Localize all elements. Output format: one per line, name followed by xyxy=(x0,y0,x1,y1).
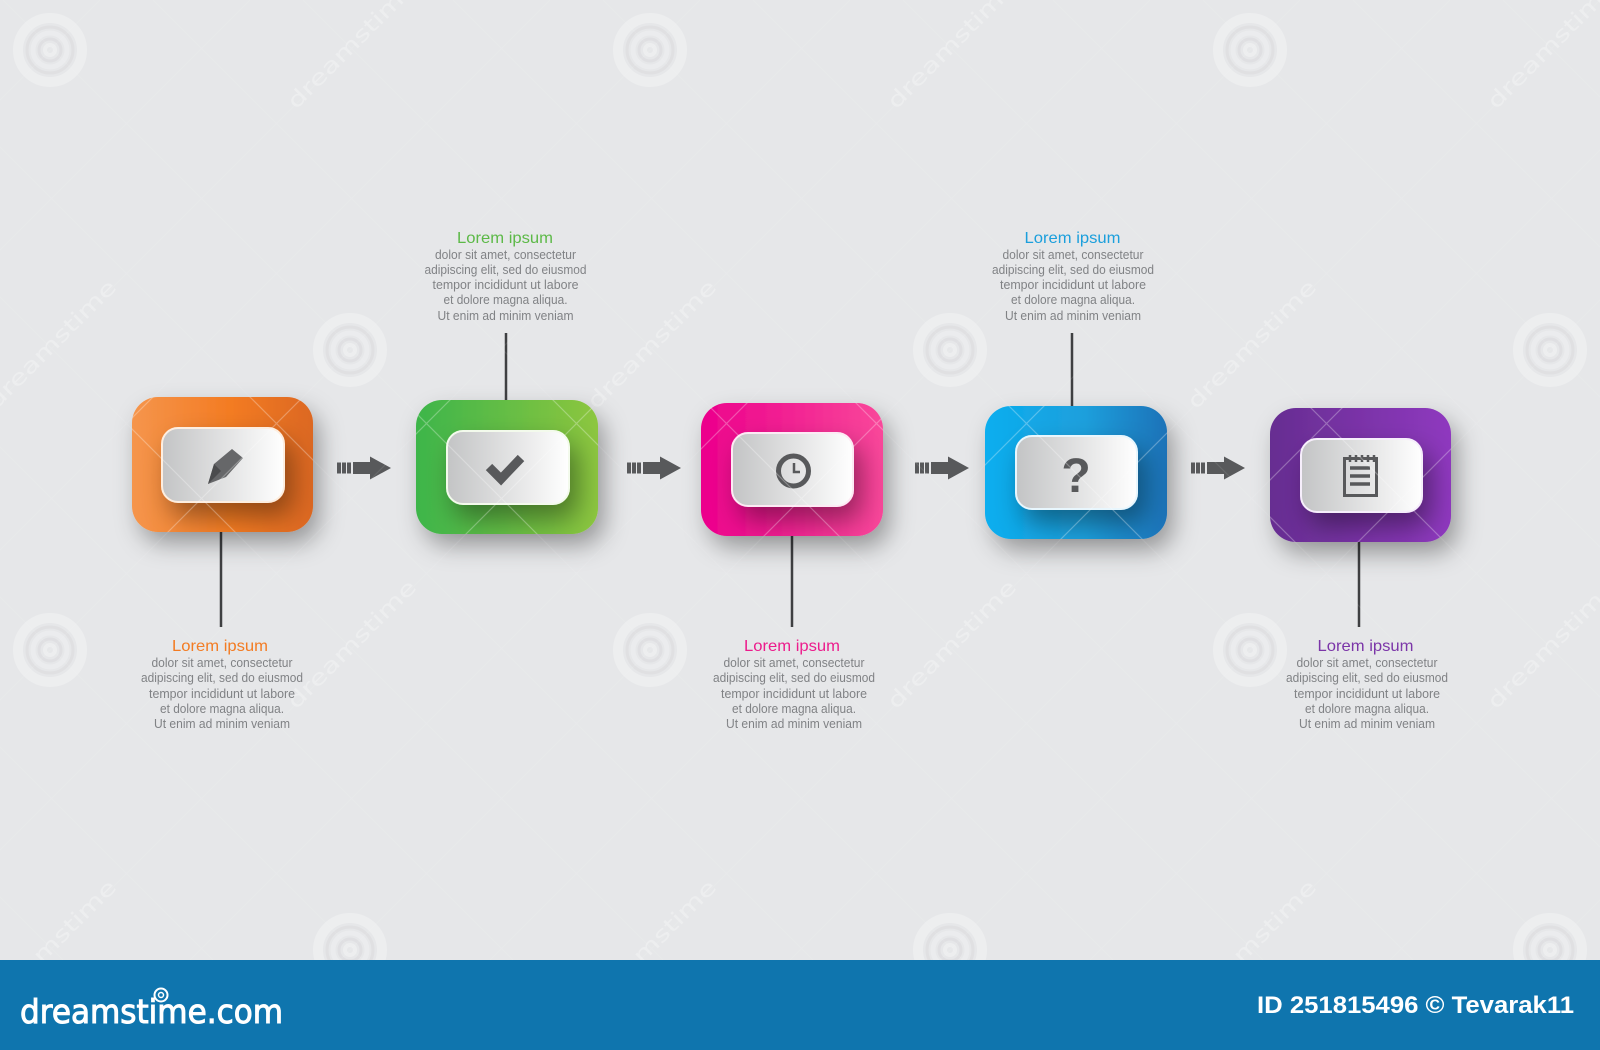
watermark text: dreamstime xyxy=(1183,875,1321,1014)
text block: step 3: adipiscing elit, sed do eiusmod xyxy=(713,671,875,685)
text block: step 2: Lorem ipsum xyxy=(457,230,553,247)
text block: step 4: Ut enim ad minim veniam xyxy=(1005,309,1141,323)
text block: step 3: dolor sit amet, consectetur xyxy=(724,656,864,670)
watermark text: dreamstime xyxy=(283,0,421,114)
watermark text: dreamstime xyxy=(1483,575,1600,714)
icon: check mark xyxy=(489,458,521,479)
text block: step 4: dolor sit amet, consectetur xyxy=(1002,248,1144,262)
watermark text: dreamstime xyxy=(283,575,421,714)
panel: step 5 purple xyxy=(1270,408,1451,542)
arrow 2 xyxy=(627,456,681,480)
panel: step 4 blue xyxy=(985,406,1167,539)
arrow 1 xyxy=(337,456,391,480)
image credit: ID 251815496 © Tevarak11 xyxy=(1257,992,1574,1019)
text block: step 3: Lorem ipsum xyxy=(744,638,840,655)
text block: step 2: tempor incididunt ut labore xyxy=(432,278,579,292)
watermark text: dreamstime xyxy=(883,0,1021,114)
text block: step 5 xyxy=(1286,638,1448,731)
connector line: step 2 xyxy=(505,333,507,402)
arrow 3 xyxy=(915,456,969,480)
watermark text: dreamstime xyxy=(1183,275,1321,414)
text block: step 3: Ut enim ad minim veniam xyxy=(726,717,862,731)
connector line: step 3 xyxy=(791,534,793,627)
text block: step 5: Ut enim ad minim veniam xyxy=(1299,717,1435,731)
text block: step 4: et dolore magna aliqua. xyxy=(1011,293,1135,307)
logo spiral xyxy=(154,988,168,1002)
text block: step 1: tempor incididunt ut labore xyxy=(149,687,295,701)
watermark text: dreamstime xyxy=(583,275,721,414)
connector line: step 4 xyxy=(1071,333,1073,408)
text block: step 4: Lorem ipsum xyxy=(1024,230,1120,247)
text block: step 1: Ut enim ad minim veniam xyxy=(154,717,290,731)
text block: step 1: et dolore magna aliqua. xyxy=(160,702,284,716)
icon: notepad xyxy=(1344,455,1376,496)
text block: step 2: adipiscing elit, sed do eiusmod xyxy=(424,263,587,277)
text block: step 4: adipiscing elit, sed do eiusmod xyxy=(992,263,1154,277)
text block: step 2: Ut enim ad minim veniam xyxy=(438,309,574,323)
watermark text: dreamstime xyxy=(883,575,1021,714)
text block: step 3 xyxy=(713,638,875,731)
panel: step 2 green xyxy=(416,400,598,534)
icon: question mark: ? xyxy=(1061,450,1091,503)
text block: step 3: tempor incididunt ut labore xyxy=(721,687,867,701)
icon: clock xyxy=(778,456,808,486)
text block: step 5: adipiscing elit, sed do eiusmod xyxy=(1286,671,1448,685)
icon: pencil xyxy=(208,449,243,484)
panel: step 1 orange xyxy=(132,397,313,532)
logo wordmark: dreamstime.com xyxy=(20,992,283,1031)
arrow 4 xyxy=(1191,456,1245,480)
text block: step 2 xyxy=(424,230,587,323)
text block: step 5: dolor sit amet, consectetur xyxy=(1296,656,1438,670)
text block: step 1: dolor sit amet, consectetur xyxy=(152,656,292,670)
text block: step 2: dolor sit amet, consectetur xyxy=(435,248,576,262)
text block: step 5: Lorem ipsum xyxy=(1318,638,1414,655)
text block: step 1: adipiscing elit, sed do eiusmod xyxy=(141,671,303,685)
text block: step 1: Lorem ipsum xyxy=(172,638,268,655)
text block: step 4 xyxy=(992,230,1154,323)
text block: step 2: et dolore magna aliqua. xyxy=(444,293,568,307)
footer banner xyxy=(0,960,1600,1050)
watermark text: dreamstime xyxy=(583,875,721,1014)
text block: step 4: tempor incididunt ut labore xyxy=(1000,278,1146,292)
text block: step 5: et dolore magna aliqua. xyxy=(1305,702,1429,716)
connector line: step 1 xyxy=(220,530,222,627)
text block: step 1 xyxy=(141,638,303,731)
watermark text: dreamstime xyxy=(1483,0,1600,114)
connector line: step 5 xyxy=(1358,540,1360,627)
panel: step 3 pink xyxy=(701,403,883,536)
text block: step 3: et dolore magna aliqua. xyxy=(732,702,856,716)
watermark diagonal lattice xyxy=(132,234,1451,728)
text block: step 5: tempor incididunt ut labore xyxy=(1294,687,1440,701)
